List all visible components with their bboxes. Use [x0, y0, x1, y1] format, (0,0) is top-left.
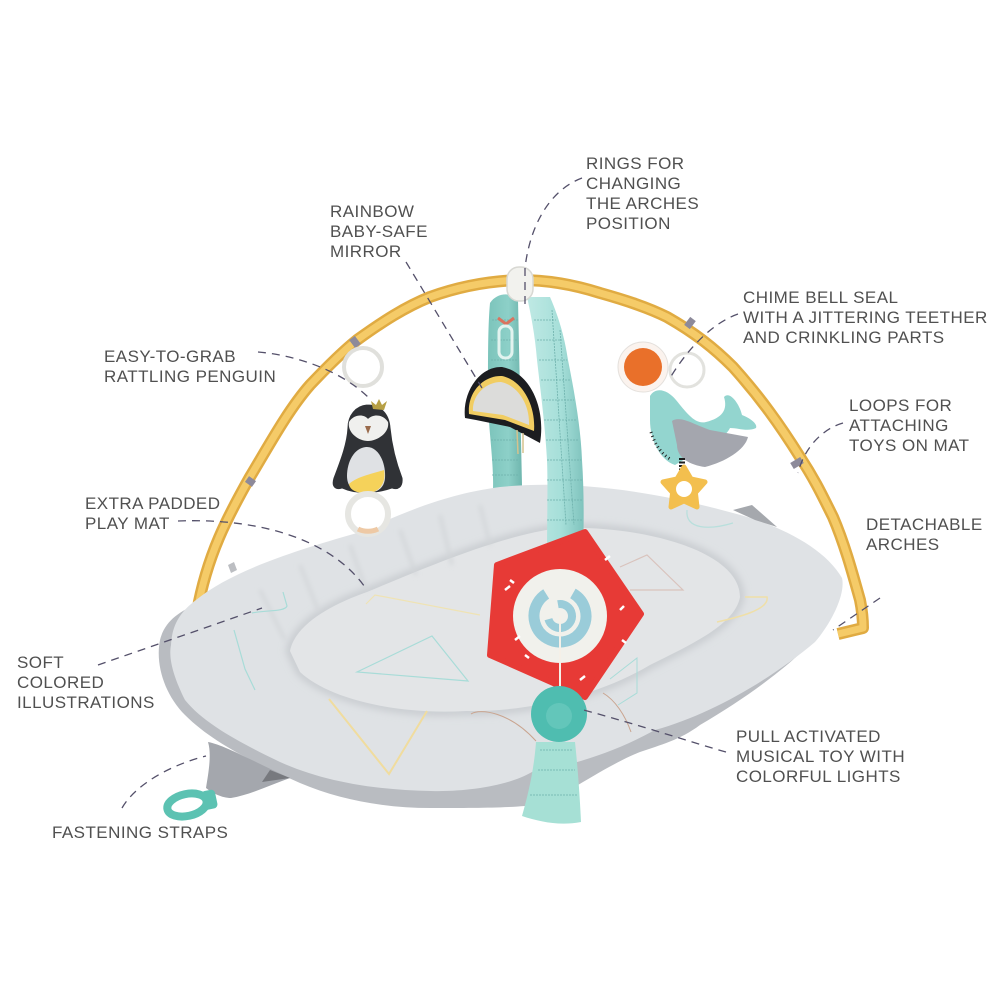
label: musical toy: MUSICAL TOY WITH — [736, 747, 905, 766]
label: rings: CHANGING — [586, 174, 681, 193]
label: rings: RINGS FOR — [586, 154, 684, 173]
label: mirror: RAINBOW — [330, 202, 414, 221]
label: mirror: MIRROR — [330, 242, 402, 261]
label: loops: LOOPS FOR — [849, 396, 952, 415]
icon: rainbow mirror — [465, 367, 541, 454]
icon: musical toy — [490, 532, 641, 824]
rim folds — [260, 505, 490, 640]
label: straps: FASTENING STRAPS — [52, 823, 228, 842]
ring on arch — [507, 267, 533, 301]
icon: rattling penguin — [332, 348, 403, 534]
pull tab — [531, 686, 587, 742]
icon: chime bell seal — [618, 342, 756, 507]
label: detachable arches: ARCHES — [866, 535, 940, 554]
seal body — [650, 390, 756, 465]
label: musical toy: PULL ACTIVATED — [736, 727, 881, 746]
label: penguin: EASY-TO-GRAB — [104, 347, 236, 366]
mat crease shadow — [290, 528, 740, 712]
icon: fastening strap — [165, 742, 290, 820]
label: musical toy: COLORFUL LIGHTS — [736, 767, 901, 786]
yellow arch — [197, 280, 863, 634]
mat grey base — [159, 604, 830, 808]
pull strap — [522, 742, 581, 824]
seal wing — [672, 419, 748, 467]
hanging clip — [498, 318, 514, 324]
label: seal: AND CRINKLING PARTS — [743, 328, 945, 347]
label: seal: WITH A JITTERING TEETHER — [743, 308, 988, 327]
label: seal: CHIME BELL SEAL — [743, 288, 898, 307]
play mat — [159, 485, 843, 808]
label: rings: POSITION — [586, 214, 671, 233]
label: padded mat: EXTRA PADDED — [85, 494, 220, 513]
label: loops: ATTACHING — [849, 416, 949, 435]
mat inner oval — [290, 528, 740, 712]
mat padded rim — [170, 485, 843, 791]
back fabric arch — [488, 294, 522, 489]
label: illustrations: SOFT — [17, 653, 64, 672]
front fabric arch — [527, 297, 584, 555]
grey frill — [733, 505, 777, 527]
label: penguin: RATTLING PENGUIN — [104, 367, 276, 386]
label: rings: THE ARCHES — [586, 194, 699, 213]
label: loops: TOYS ON MAT — [849, 436, 970, 455]
dashed leader lines — [98, 178, 880, 808]
label: illustrations: COLORED — [17, 673, 104, 692]
label: detachable arches: DETACHABLE — [866, 515, 983, 534]
label: mirror: BABY-SAFE — [330, 222, 428, 241]
label: padded mat: PLAY MAT — [85, 514, 170, 533]
arch loops — [247, 319, 802, 484]
illustrations — [357, 636, 468, 681]
label: illustrations: ILLUSTRATIONS — [17, 693, 155, 712]
